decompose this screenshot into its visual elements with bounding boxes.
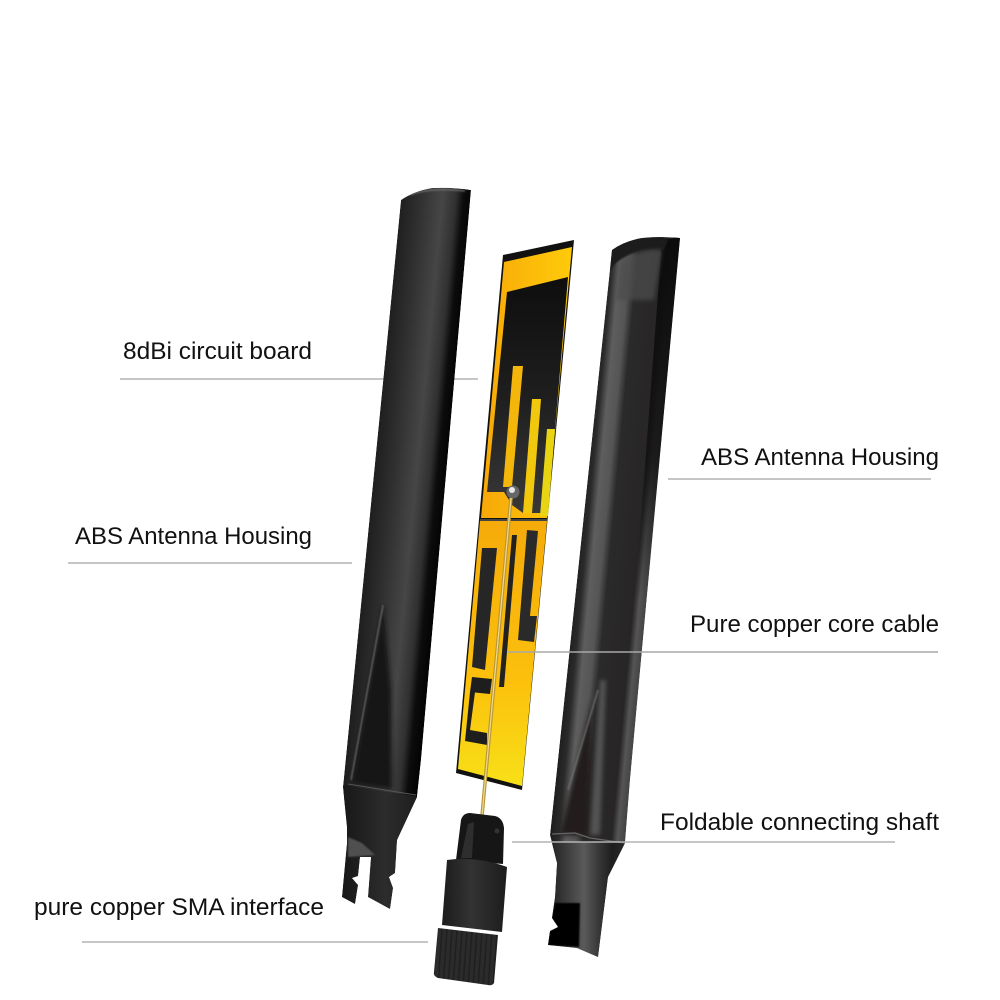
label: right ABS Antenna Housing: ABS Antenna Housing <box>701 444 939 471</box>
label: 8dBi circuit board: 8dBi circuit board <box>123 338 312 365</box>
label: left ABS Antenna Housing: ABS Antenna Housing <box>75 523 312 550</box>
foldable shaft <box>456 813 504 864</box>
leader line: foldable connecting shaft <box>512 841 895 843</box>
pure copper core cable <box>482 498 511 816</box>
lower traces <box>472 548 497 670</box>
board backing <box>456 240 574 790</box>
left antenna lower neck <box>342 785 421 909</box>
connector body <box>442 859 507 932</box>
left antenna top rim <box>410 190 465 195</box>
right antenna ridge highlight <box>590 680 606 835</box>
upper gold layer <box>481 247 572 518</box>
leader line: pure copper core cable <box>508 651 938 653</box>
solder joint <box>506 486 520 498</box>
right antenna top rim <box>610 236 668 270</box>
left antenna ridge <box>352 603 392 790</box>
left antenna latch <box>348 837 375 857</box>
right antenna dark edge <box>639 238 680 582</box>
right antenna lower neck <box>548 841 628 960</box>
board divider <box>480 519 547 521</box>
leader line: pure copper SMA interface <box>82 941 428 943</box>
label: pure copper SMA interface: pure copper SMA interface <box>34 894 324 921</box>
antenna fingers <box>503 366 523 487</box>
8dBi circuit board <box>456 240 574 790</box>
knurled nut <box>434 928 498 985</box>
leader line: right ABS housing <box>668 478 931 480</box>
right antenna seam <box>552 833 625 843</box>
right antenna socket <box>548 903 580 947</box>
upper dark area <box>487 277 568 513</box>
left antenna seam <box>348 784 416 795</box>
label: Pure copper core cable: Pure copper core cable <box>690 611 939 638</box>
SMA connector <box>434 813 507 985</box>
exploded antenna diagram <box>36 188 939 986</box>
right antenna upper highlight <box>616 250 662 300</box>
leader line: left ABS housing <box>68 562 352 564</box>
leader line: 8dBi circuit board <box>120 378 478 380</box>
label: Foldable connecting shaft: Foldable connecting shaft <box>660 809 939 836</box>
lower gold layer <box>458 521 547 786</box>
left antenna housing <box>342 188 471 909</box>
right antenna ridge <box>560 702 592 838</box>
right antenna housing <box>548 236 682 960</box>
